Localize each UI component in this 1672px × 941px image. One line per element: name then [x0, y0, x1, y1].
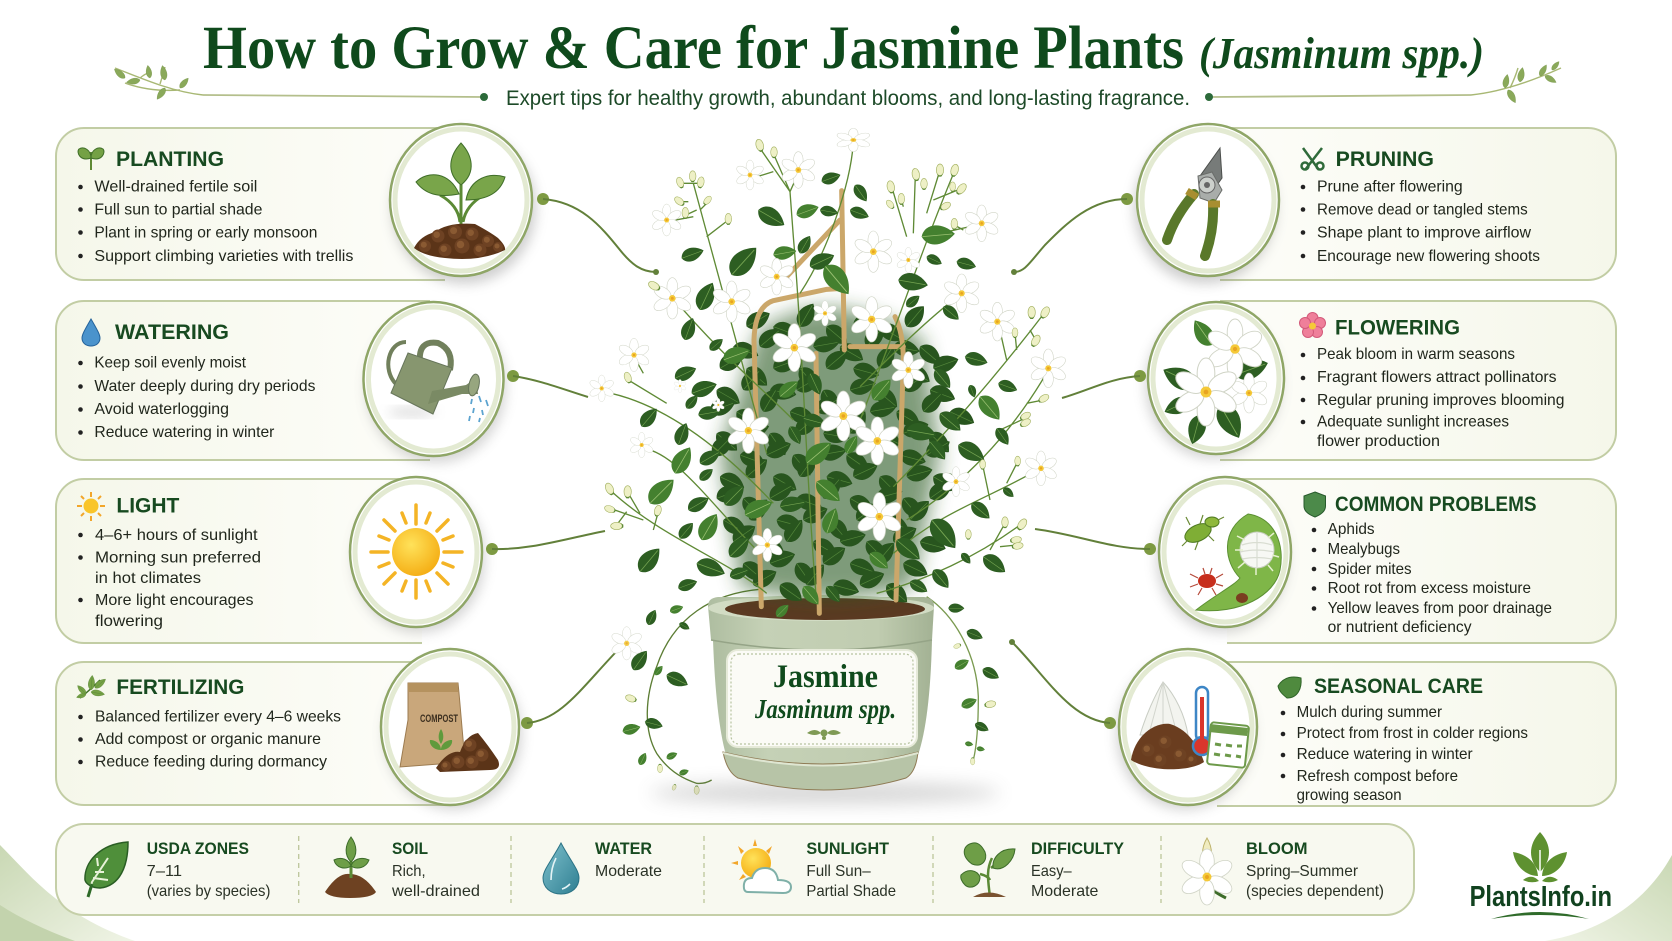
- blossoms: [588, 128, 1068, 562]
- illustration: jasmine plant on trellis: [588, 128, 1068, 620]
- bullet list: More light encourages: [95, 592, 254, 609]
- heading: FERTILIZING: [116, 676, 244, 699]
- bullet list: Fragrant flowers attract pollinators: [1317, 369, 1557, 386]
- title: (Jasminum spp.): [1199, 29, 1484, 78]
- fact: soil: SOIL: [392, 839, 428, 858]
- bullet list: [78, 527, 261, 630]
- icon circle: pests on leaf: [1156, 477, 1291, 633]
- bullet list: Peak bloom in warm seasons: [1317, 346, 1515, 363]
- bullet list: Spider mites: [1328, 561, 1412, 578]
- icon circle: compost bag: COMPOST: [420, 713, 458, 725]
- heading: FLOWERING: [1335, 316, 1460, 339]
- icon circle: jasmine blossoms: [1145, 302, 1284, 459]
- icon: pink flower: [1300, 312, 1326, 338]
- pot rim: [708, 597, 934, 650]
- icon: water drop: [82, 319, 100, 346]
- fact: difficulty: Easy–: [1031, 863, 1072, 880]
- illustration: trailing vines: [610, 589, 1001, 794]
- trellis: [754, 191, 903, 613]
- fact: usda zones: (varies by species): [147, 883, 270, 900]
- stems: [603, 143, 1048, 603]
- logo: PlantsInfo.in: [1470, 832, 1612, 919]
- bullet list: Avoid waterlogging: [94, 401, 229, 418]
- bullet list: Morning sun preferred: [95, 549, 261, 566]
- fact: bloom: (species dependent): [1246, 883, 1384, 900]
- connector: light: [486, 531, 605, 555]
- icon: shield: [1304, 492, 1326, 517]
- pot label: [727, 650, 917, 747]
- fact: soil: well-drained: [391, 883, 480, 900]
- fact: usda zones: 7–11: [147, 863, 182, 880]
- pot body: [713, 640, 932, 768]
- fact: difficulty: DIFFICULTY: [1031, 839, 1125, 858]
- fact: usda zones: [85, 839, 270, 900]
- bullet list: Protect from frost in colder regions: [1297, 725, 1528, 742]
- connector: planting: [537, 193, 659, 275]
- bullet list: Regular pruning improves blooming: [1317, 392, 1564, 409]
- icon circle: mulch, thermometer and calendar: [1116, 649, 1257, 810]
- bullet list: Reduce watering in winter: [94, 424, 275, 441]
- bullet list: [1281, 704, 1528, 804]
- fact: bloom: BLOOM: [1246, 839, 1308, 858]
- bullet list: [1301, 179, 1540, 265]
- foliage: [633, 169, 1019, 620]
- bullet list: Root rot from excess moisture: [1328, 580, 1531, 597]
- connector: common problems: [1035, 529, 1156, 555]
- panel: flowering: [1145, 301, 1616, 460]
- title: How to Grow & Care for Jasmine Plants: [203, 15, 1184, 82]
- bullet list: Well-drained fertile soil: [94, 179, 257, 196]
- bullet list: in hot climates: [95, 570, 201, 587]
- icon: seasonal leaf: [1278, 677, 1301, 698]
- pot label: Jasmine: [773, 659, 878, 695]
- bullet list: Mulch during summer: [1297, 704, 1443, 721]
- bullet list: Keep soil evenly moist: [94, 355, 247, 372]
- fact: sunlight: [731, 839, 896, 900]
- panel: light: [56, 477, 485, 643]
- illustration: flower pot: [650, 595, 1000, 804]
- label ornament: [807, 730, 841, 740]
- pot label: Jasminum spp.: [754, 694, 896, 724]
- connector: watering: [507, 370, 588, 397]
- fact: water: Moderate: [595, 863, 662, 880]
- bullet list: Encourage new flowering shoots: [1317, 248, 1540, 265]
- panel: common problems: [1156, 477, 1616, 643]
- bullet list: Plant in spring or early monsoon: [94, 224, 317, 241]
- icon circle: compost bag: [381, 649, 522, 810]
- heading: LIGHT: [116, 495, 180, 518]
- icon: scissors: [1302, 148, 1324, 170]
- panel: seasonal care: [1116, 649, 1616, 810]
- fact: bloom: Spring–Summer: [1246, 863, 1359, 880]
- bullet list: [1301, 346, 1564, 450]
- panel: planting: [56, 124, 536, 284]
- bullet list: 4–6+ hours of sunlight: [95, 527, 258, 544]
- subtitle: Expert tips for healthy growth, abundant blooms, and long-lasting fragrance.: [506, 87, 1190, 110]
- heading: WATERING: [115, 321, 229, 344]
- bullet list: Balanced fertilizer every 4–6 weeks: [95, 709, 341, 726]
- fact: water: WATER: [595, 839, 652, 858]
- connector: seasonal care: [1009, 639, 1116, 729]
- icon circle: sun: [350, 477, 485, 633]
- heading: SEASONAL CARE: [1314, 675, 1483, 698]
- icon: small sun: [77, 492, 105, 521]
- potting soil: [725, 598, 925, 620]
- connector: fertilizing: [521, 653, 615, 729]
- bullet list: or nutrient deficiency: [1328, 619, 1472, 636]
- bullet list: Reduce watering in winter: [1297, 746, 1473, 763]
- bullet list: Prune after flowering: [1317, 179, 1463, 196]
- bullet list: Remove dead or tangled stems: [1317, 201, 1528, 218]
- bullet list: Aphids: [1328, 521, 1375, 538]
- pot saucer: [723, 752, 918, 790]
- fact: water: [543, 839, 662, 894]
- bullet list: Adequate sunlight increases: [1317, 414, 1509, 431]
- bullet list: Full sun to partial shade: [94, 201, 263, 218]
- dense back foliage: [707, 299, 978, 608]
- bullet list: Support climbing varieties with trellis: [94, 248, 353, 265]
- fact: soil: Rich,: [392, 863, 426, 880]
- connector: pruning: [1011, 193, 1133, 275]
- fact: difficulty: [961, 839, 1125, 900]
- fact: soil: [325, 837, 480, 900]
- icon circle: watering can: [364, 302, 506, 463]
- bullet list: Reduce feeding during dormancy: [95, 753, 327, 770]
- bullet list: Refresh compost before: [1297, 768, 1458, 785]
- ornament: left twig divider: [112, 65, 488, 101]
- bullet list: [1312, 521, 1552, 636]
- panel: fertilizing: [56, 649, 522, 810]
- bullet list: Water deeply during dry periods: [94, 378, 315, 395]
- fact: usda zones: USDA ZONES: [147, 839, 249, 858]
- heading: COMMON PROBLEMS: [1335, 493, 1537, 516]
- bullet list: Add compost or organic manure: [95, 731, 321, 748]
- bullet list: growing season: [1297, 787, 1402, 804]
- bullet list: [78, 179, 353, 265]
- panel: watering: [56, 301, 506, 463]
- heading: PLANTING: [116, 148, 224, 171]
- flower buds: [604, 138, 1051, 550]
- logo: PlantsInfo.in: PlantsInfo.in: [1470, 881, 1612, 913]
- bullet list: [78, 355, 315, 441]
- connector: flowering: [1062, 370, 1146, 398]
- fact: sunlight: Partial Shade: [806, 883, 896, 900]
- heading: PRUNING: [1336, 148, 1434, 171]
- icon circle: pruners: [1134, 124, 1279, 284]
- background: bottom corner swooshes: [0, 845, 1672, 941]
- bullet list: Shape plant to improve airflow: [1317, 224, 1531, 241]
- icon circle: sprout in soil: [390, 124, 536, 284]
- icon: leaf sprig: [76, 675, 107, 700]
- bullet list: Yellow leaves from poor drainage: [1328, 600, 1552, 617]
- panel: pruning: [1134, 124, 1616, 284]
- bullet list: Mealybugs: [1328, 541, 1400, 558]
- fact: sunlight: Full Sun–: [806, 863, 871, 880]
- fact: sunlight: SUNLIGHT: [806, 839, 890, 858]
- fact: bloom: [1179, 838, 1384, 905]
- icon: sprout: [78, 148, 104, 170]
- bullet list: flowering: [95, 613, 163, 630]
- ornament: right twig divider: [1205, 60, 1561, 104]
- bullet list: [78, 709, 341, 770]
- bullet list: flower production: [1317, 433, 1440, 450]
- panel: quick facts bar: [56, 824, 1414, 915]
- fact: difficulty: Moderate: [1031, 883, 1099, 900]
